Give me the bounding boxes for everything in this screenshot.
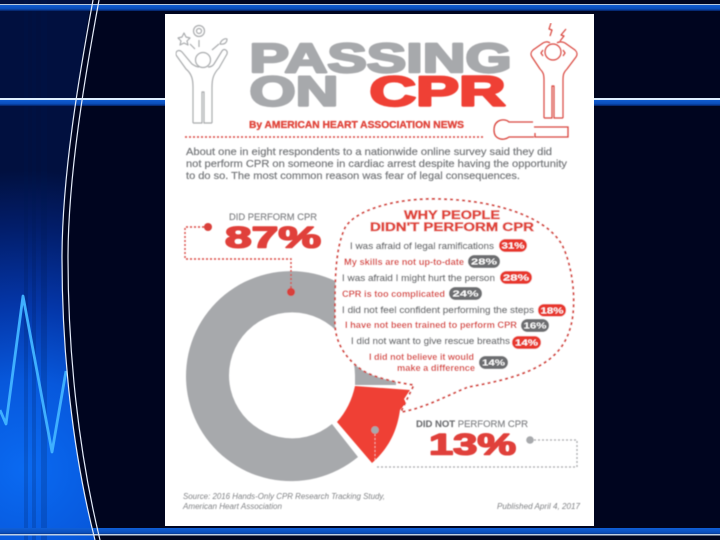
byline: By AMERICAN HEART ASSOCIATION NEWS <box>249 120 464 131</box>
reasons list: I was afraid I might hurt the person <box>342 273 495 284</box>
percentage pills: 28% <box>471 258 497 266</box>
reasons list: make a difference <box>397 363 475 374</box>
callout: did perform 87%: DID PERFORM CPR <box>229 212 317 223</box>
callout: did perform 87%: 87% <box>225 222 321 254</box>
donut chart: did not perform <box>337 386 410 463</box>
reasons list: CPR is too complicated <box>342 289 445 300</box>
publication date: Published April 4, 2017 <box>497 502 581 511</box>
icon: confused person <box>176 26 227 123</box>
icon: stressed person <box>531 23 577 118</box>
intro text: to do so. The most common reason was fear of legal consequences. <box>186 170 520 182</box>
source note <box>182 492 385 511</box>
callout: did not perform 13% <box>371 419 577 467</box>
callout: did perform 87% <box>185 212 321 296</box>
intro text: About one in eight respondents to a nationwide online survey said they did <box>186 146 552 158</box>
intro text: not perform CPR on someone in cardiac arrest despite having the opportunity <box>186 158 568 170</box>
reasons list: I have not been trained to perform CPR <box>345 320 517 331</box>
title <box>250 35 512 114</box>
percentage pills: 16% <box>524 322 546 330</box>
callout: did not perform 13%: 13% <box>429 428 516 462</box>
icon: person lying down <box>494 120 568 139</box>
percentage pills <box>449 239 566 369</box>
reasons list: I did not want to give rescue breaths <box>351 336 510 347</box>
callout: did not perform 13%: DID NOT PERFORM CPR <box>416 419 528 430</box>
reasons list: I did not feel confident performing the steps <box>342 305 534 316</box>
source note: American Heart Association <box>182 502 283 511</box>
title: PASSING <box>250 35 512 81</box>
reasons list <box>342 241 534 374</box>
donut chart: did perform <box>186 271 396 481</box>
reasons heading: DIDN'T PERFORM CPR <box>370 220 534 234</box>
reasons list: I did not believe it would <box>369 352 474 363</box>
percentage pills: 24% <box>452 290 478 298</box>
source note: Source: 2016 Hands-Only CPR Research Tracking Study, <box>183 492 385 501</box>
percentage pills: 28% <box>503 274 529 282</box>
panel: infographic <box>165 14 594 526</box>
reasons heading <box>370 208 534 234</box>
reasons list: I was afraid of legal ramifications <box>350 241 494 252</box>
reasons heading: WHY PEOPLE <box>404 208 500 222</box>
percentage pills: 31% <box>502 242 524 250</box>
title: ON <box>250 68 338 114</box>
percentage pills: 18% <box>540 306 564 316</box>
title: CPR <box>370 68 506 114</box>
speech bubble: why people didn't perform <box>335 199 574 412</box>
percentage pills: 14% <box>515 338 538 348</box>
intro text <box>186 146 568 182</box>
percentage pills: 14% <box>482 358 505 368</box>
reasons list: My skills are not up-to-date <box>344 257 464 268</box>
